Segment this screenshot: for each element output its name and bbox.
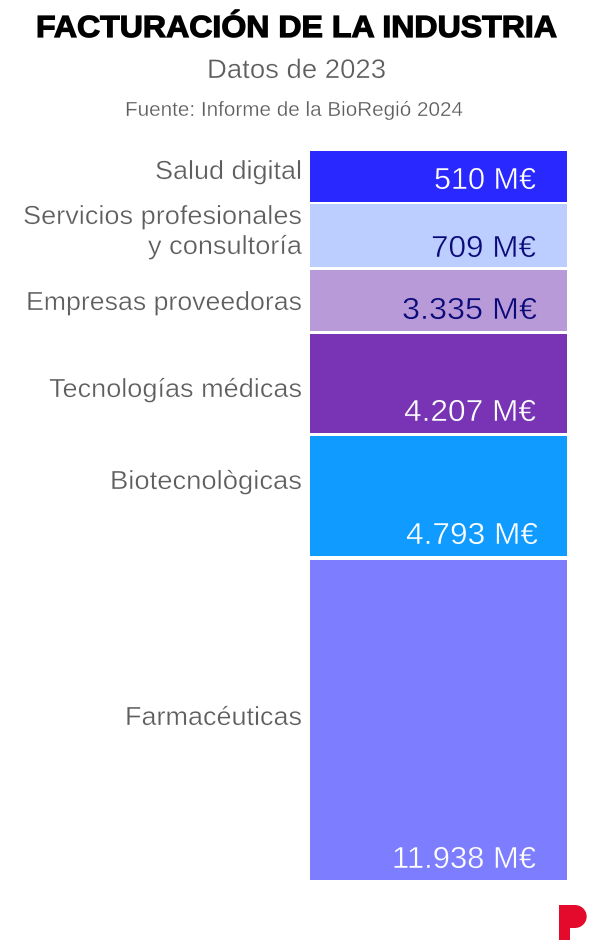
bar: Biotecnològicas <box>310 436 567 556</box>
label: Farmacéuticas: Farmacéuticas <box>125 701 302 731</box>
value: 4.793 M€: 4.793 M€ <box>406 516 538 551</box>
source: Fuente: Informe de la BioRegió 2024 <box>125 98 463 121</box>
bar: Salud digital <box>310 151 567 202</box>
bar: Farmacéuticas <box>310 560 567 880</box>
title: FACTURACIÓN DE LA INDUSTRIA <box>36 8 557 44</box>
row: Servicios profesionales y consultoría <box>23 200 567 267</box>
bar: Tecnologías médicas <box>310 334 567 433</box>
row: Biotecnològicas <box>110 436 567 556</box>
value: 709 M€: 709 M€ <box>431 229 536 264</box>
row: Empresas proveedoras <box>26 270 567 331</box>
label: Tecnologías médicas: Tecnologías médicas <box>49 373 302 403</box>
label: Salud digital: Salud digital <box>155 155 302 185</box>
icon: red P logo <box>559 905 587 940</box>
value: 4.207 M€: 4.207 M€ <box>404 393 536 428</box>
value: 3.335 M€: 3.335 M€ <box>402 291 537 326</box>
value: 11.938 M€: 11.938 M€ <box>392 840 536 875</box>
bar: Empresas proveedoras <box>310 270 567 331</box>
bar: Servicios profesionales <box>310 204 567 267</box>
row: Salud digital <box>155 151 567 202</box>
label: Servicios profesionales y consultoría: Servicios profesionales <box>23 200 302 230</box>
row: Farmacéuticas <box>125 560 567 880</box>
label: Servicios profesionales y consultoría: y consultoría <box>148 230 303 260</box>
row: Tecnologías médicas <box>49 334 567 433</box>
value: 510 M€: 510 M€ <box>434 161 536 196</box>
label: Biotecnològicas: Biotecnològicas <box>110 465 302 495</box>
subtitle: Datos de 2023 <box>207 54 386 84</box>
label: Empresas proveedoras: Empresas proveedoras <box>26 286 302 316</box>
